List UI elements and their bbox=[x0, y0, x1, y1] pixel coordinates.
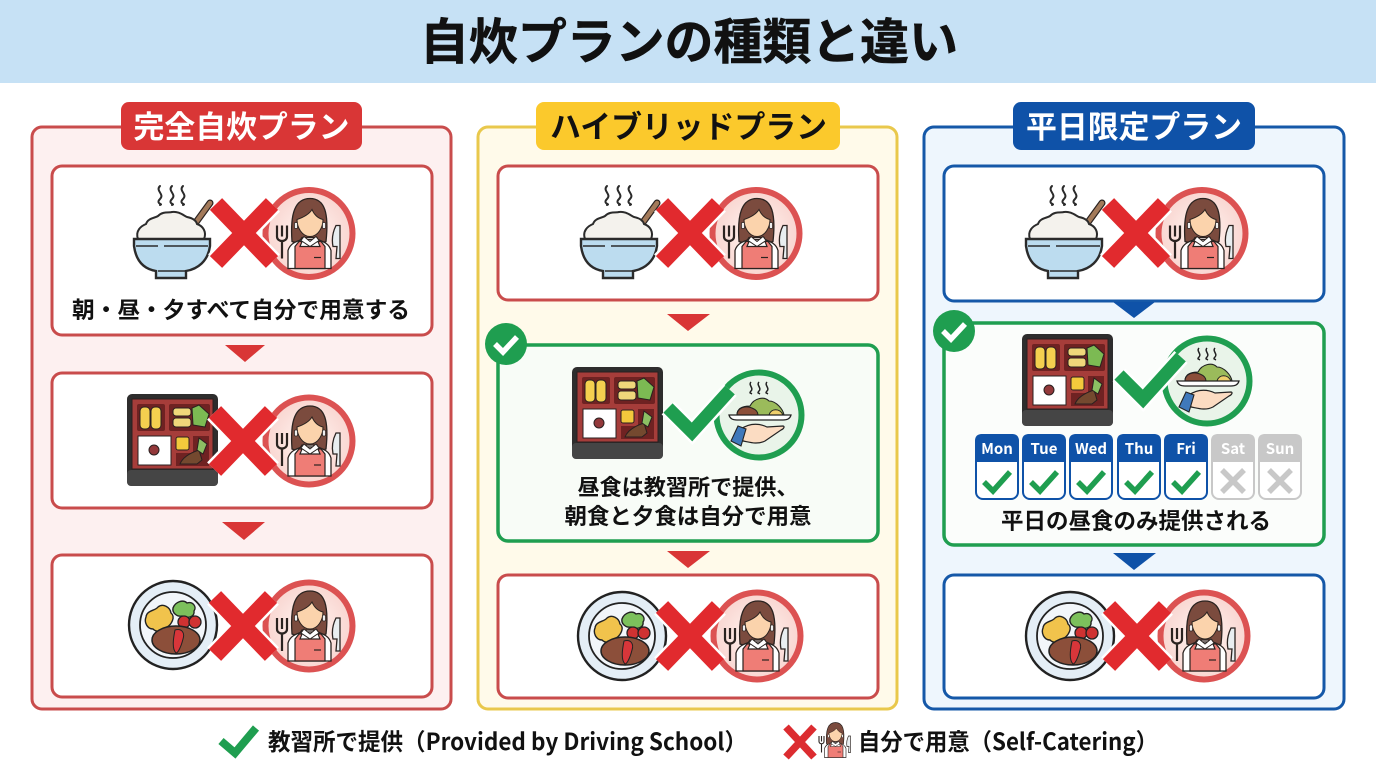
icon: cross bbox=[215, 597, 271, 655]
panel: weekday plan bbox=[924, 102, 1344, 709]
icon: self catering woman bbox=[1160, 592, 1248, 680]
legend: self catering text: 自分で用意（Self-Catering） bbox=[858, 723, 1158, 757]
icon: serving hand bbox=[1164, 338, 1250, 424]
card: lunch provided bbox=[498, 345, 878, 541]
text: weekday lunch only: 平日の昼食のみ提供される bbox=[1001, 504, 1271, 536]
icon: rice bowl bbox=[134, 186, 210, 278]
day: Sat bbox=[1211, 434, 1255, 499]
day: Fri: Fri bbox=[1176, 438, 1196, 459]
day: Thu bbox=[1117, 434, 1161, 499]
legend: provided check icon bbox=[221, 728, 256, 753]
icon: bento bbox=[127, 394, 218, 486]
icon: bento bbox=[572, 367, 663, 459]
day: Fri bbox=[1164, 434, 1208, 499]
icon: cross bbox=[216, 204, 272, 262]
day: Thu: Thu bbox=[1125, 438, 1153, 459]
badge: check bbox=[933, 310, 975, 352]
header band bbox=[0, 0, 1376, 83]
text: lunch provided by school: 朝食と夕食は自分で用意 bbox=[564, 499, 812, 531]
card: dinner bbox=[52, 555, 432, 697]
day: Mon: Mon bbox=[981, 438, 1013, 459]
title: 自炊プランの種類と違い bbox=[420, 3, 958, 74]
weekday calendar bbox=[975, 434, 1302, 499]
icon: self catering woman bbox=[266, 398, 352, 484]
icon: cross bbox=[1109, 607, 1165, 665]
card: weekday lunch provided bbox=[944, 323, 1324, 545]
legend: cross icon bbox=[786, 727, 814, 757]
icon: cross bbox=[662, 607, 718, 665]
icon: self catering woman bbox=[266, 190, 352, 277]
day: Sun bbox=[1258, 434, 1302, 499]
day: Sat: Sat bbox=[1221, 438, 1246, 459]
icon: serving hand bbox=[716, 372, 802, 458]
badge: check bbox=[485, 323, 527, 365]
arrow bbox=[225, 345, 265, 362]
icon: dinner plate bbox=[1026, 592, 1114, 680]
legend: woman icon bbox=[819, 722, 850, 758]
day: Tue: Tue bbox=[1031, 438, 1058, 459]
day: Tue bbox=[1022, 434, 1066, 499]
icon: green check bbox=[668, 390, 730, 432]
panel: full self-catering plan bbox=[32, 102, 451, 709]
icon: dinner plate bbox=[129, 581, 217, 669]
icon: self catering woman bbox=[714, 592, 800, 680]
heading: full self-catering: 完全自炊プラン bbox=[134, 102, 350, 147]
icon: dinner plate bbox=[578, 592, 666, 680]
icon: bento bbox=[1022, 334, 1113, 426]
card: dinner bbox=[498, 575, 878, 698]
card: breakfast bbox=[944, 166, 1324, 301]
icon: self catering woman bbox=[1158, 190, 1246, 277]
card: dinner bbox=[944, 575, 1324, 698]
arrow bbox=[1113, 302, 1155, 318]
icon: self catering woman bbox=[712, 190, 800, 277]
arrow bbox=[1113, 553, 1156, 570]
heading: weekday: 平日限定プラン bbox=[1026, 102, 1242, 147]
legend bbox=[221, 722, 1158, 758]
text: lunch provided by school: 昼食は教習所で提供、 bbox=[578, 470, 798, 502]
day: Sun: Sun bbox=[1266, 438, 1294, 459]
icon: rice bowl bbox=[581, 186, 657, 278]
card: breakfast bbox=[498, 166, 878, 300]
icon: self catering woman bbox=[266, 582, 352, 670]
card: lunch bbox=[52, 373, 432, 508]
arrow bbox=[667, 314, 710, 331]
card: breakfast bbox=[52, 166, 432, 335]
day: Mon bbox=[975, 434, 1019, 499]
day: Wed: Wed bbox=[1075, 438, 1107, 459]
icon: rice bowl bbox=[1026, 186, 1102, 278]
text: all meals self prepared: 朝・昼・夕すべて自分で用意する bbox=[72, 293, 410, 325]
day: Wed bbox=[1069, 434, 1113, 499]
icon: green check bbox=[1119, 357, 1181, 399]
icon: cross bbox=[662, 204, 718, 262]
heading: hybrid: ハイブリッドプラン bbox=[550, 102, 827, 147]
legend: provided text: 教習所で提供（Provided by Driving School） bbox=[268, 723, 747, 757]
arrow bbox=[222, 522, 265, 540]
panel: hybrid plan bbox=[478, 102, 897, 709]
arrow bbox=[667, 551, 710, 568]
text: lunch provided by school bbox=[564, 470, 812, 531]
icon: cross bbox=[1108, 204, 1164, 262]
icon: cross bbox=[215, 412, 271, 470]
